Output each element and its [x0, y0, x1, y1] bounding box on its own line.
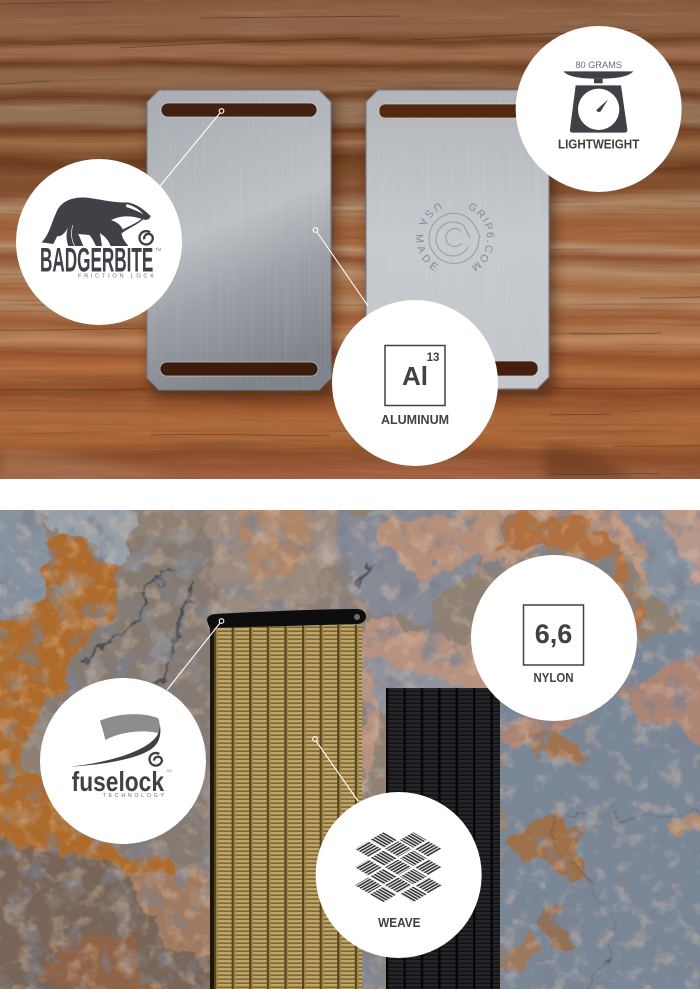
label: lightweight: LIGHTWEIGHT	[558, 137, 640, 151]
pointer line: weave	[313, 737, 358, 801]
callout: weave	[316, 792, 482, 958]
callout: aluminum	[332, 300, 498, 466]
icon: 6,6 cell	[524, 605, 584, 665]
callout: nylon	[471, 555, 637, 721]
pointer line: fuselock	[167, 619, 224, 690]
callout: fuselock	[40, 678, 206, 844]
black strap tip	[207, 609, 366, 628]
icon: periodic table cell: 13	[427, 352, 439, 364]
label: weave: WEAVE	[378, 915, 421, 930]
icon: scale	[563, 71, 633, 133]
trademark: TM	[155, 247, 162, 252]
icon: weave pattern	[354, 832, 443, 903]
engraved logo	[416, 203, 494, 272]
engraved logo: GRIP6.COM	[469, 203, 494, 272]
pointer line: aluminum	[313, 228, 368, 306]
black nylon strap	[386, 688, 500, 989]
panel: wood background with aluminum plates	[0, 0, 700, 479]
top slot	[379, 104, 529, 118]
icon: badger	[42, 198, 151, 246]
engraved logo: USA MADE	[416, 204, 442, 271]
wordmark: fuselock	[72, 766, 164, 797]
subtitle: TECHNOLOGY	[103, 793, 164, 799]
callout: badgerbite	[16, 159, 182, 325]
icon: periodic table cell	[385, 346, 445, 406]
aluminum plate: front	[147, 90, 331, 390]
label: 80 grams: 80 GRAMS	[575, 60, 622, 70]
bottom slot	[495, 361, 538, 376]
subtitle: FRICTION LOCK	[78, 274, 154, 280]
icon: periodic table cell: Al	[402, 361, 428, 391]
label: nylon: NYLON	[534, 671, 574, 685]
label: aluminum: ALUMINUM	[381, 413, 449, 427]
top slot	[161, 103, 317, 117]
coyote nylon strap	[207, 609, 366, 989]
wood texture	[0, 0, 700, 510]
stone texture	[0, 480, 700, 989]
icon: grip6 spiral	[149, 753, 162, 766]
aluminum plate: back with engraving	[365, 89, 550, 390]
plate shadows	[150, 96, 555, 398]
callout: badgerbite: BADGERBITE	[40, 241, 153, 279]
pointer line: badgerbite	[160, 109, 224, 186]
panel: stone background with webbing straps	[0, 480, 700, 989]
icon: 6,6 cell: 6,6	[535, 619, 572, 649]
icon: grip6 spiral	[139, 231, 153, 244]
trademark: TM	[166, 768, 172, 773]
icon: fuselock band	[70, 714, 160, 767]
callout: lightweight	[516, 26, 682, 192]
bottom slot	[160, 362, 318, 376]
